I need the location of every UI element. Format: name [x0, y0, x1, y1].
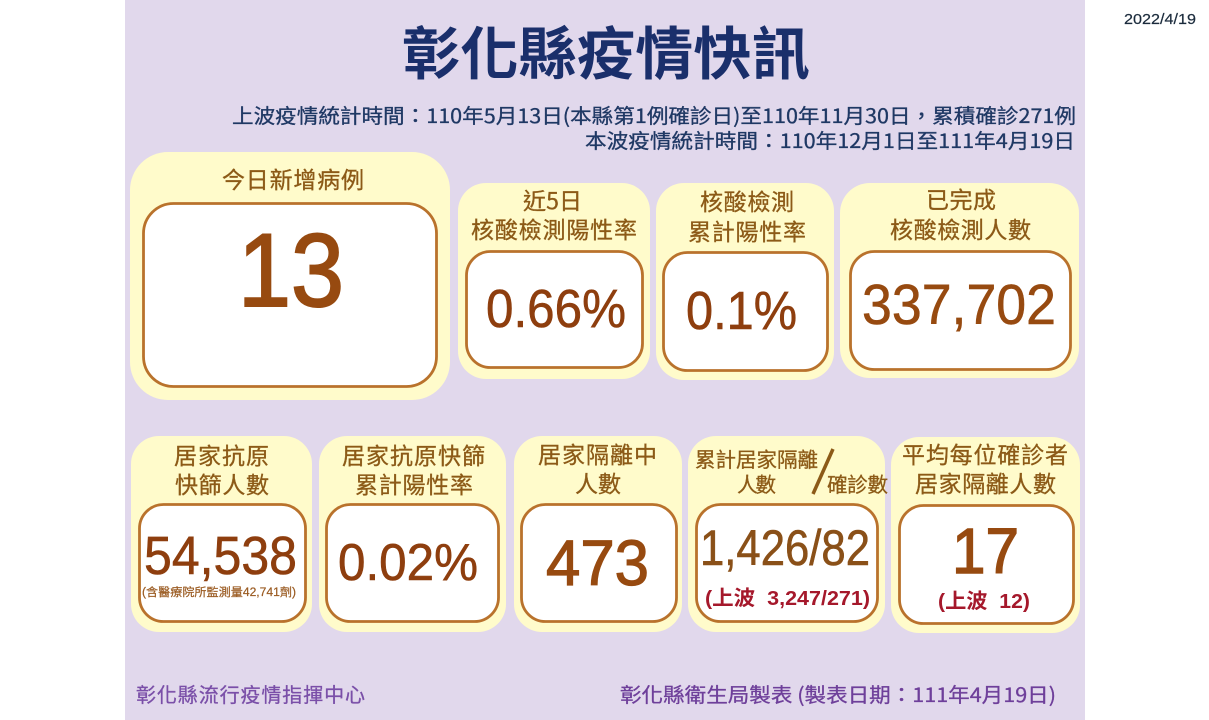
note: hospital monitoring: (含醫療院所監測量42,741劑)	[142, 585, 296, 599]
value: 17: 17	[952, 515, 1019, 587]
label: PCR tests completed	[890, 181, 1031, 245]
panel: cumulative PCR positivity	[656, 183, 834, 380]
label: home antigen cumulative positivity: 累計陽性率	[355, 466, 473, 500]
panel: currently in home isolation	[514, 436, 682, 632]
previous wave value: (上波 3,247/271)	[705, 587, 870, 610]
value: 0.1%: 0.1%	[686, 281, 797, 341]
label: home antigen cumulative positivity	[342, 437, 485, 500]
title: 彰化縣疫情快訊	[402, 9, 810, 91]
lavender background panel	[125, 0, 1085, 720]
previous wave period: 上波疫情統計時間：110年5月13日(本縣第1例確診日)至110年11月30日，累積確診271例	[232, 100, 1076, 129]
value: 1,426/82: 1,426/82	[700, 520, 870, 576]
label: home antigen cumulative positivity: 居家抗原快篩	[342, 437, 485, 471]
label: cumulative home isolation / confirmed	[695, 443, 888, 498]
label: currently in home isolation: 人數	[575, 465, 621, 499]
label: 5-day PCR positivity: 核酸檢測陽性率	[471, 211, 637, 245]
value: 473: 473	[546, 527, 649, 599]
label: cumulative home isolation / confirmed: 確診數	[827, 468, 888, 498]
panel: home antigen cumulative positivity	[319, 436, 506, 632]
value: 0.66%: 0.66%	[486, 279, 626, 339]
label: cumulative PCR positivity	[688, 183, 806, 247]
label: average isolated per confirmed case: 平均每位確診者	[902, 436, 1068, 470]
label: PCR tests completed: 已完成	[926, 181, 996, 215]
label: cumulative home isolation / confirmed: 累計居家隔離	[695, 443, 818, 473]
label: currently in home isolation	[538, 436, 657, 499]
value: 13: 13	[238, 213, 344, 329]
statistics period text	[232, 100, 1076, 154]
previous wave value: (上波 12)	[938, 590, 1030, 613]
label: cumulative PCR positivity: 核酸檢測	[700, 183, 794, 217]
value: 54,538: 54,538	[144, 526, 297, 586]
footer: command center: 彰化縣流行疫情指揮中心	[136, 679, 365, 708]
label: currently in home isolation: 居家隔離中	[538, 436, 657, 470]
label: average isolated per confirmed case: 居家隔離人數	[915, 465, 1056, 499]
panel: average isolated per confirmed case	[891, 436, 1080, 633]
panel: PCR tests completed	[840, 181, 1079, 378]
label: 5-day PCR positivity: 近5日	[523, 182, 582, 216]
panel: new cases today	[130, 152, 450, 400]
date stamp: 2022/4/19	[1124, 11, 1196, 28]
label: average isolated per confirmed case	[902, 436, 1068, 499]
label: home antigen screenings: 快篩人數	[175, 466, 269, 500]
value: 0.02%: 0.02%	[338, 534, 478, 592]
label: cumulative PCR positivity: 累計陽性率	[688, 213, 806, 247]
panel: home antigen screenings	[131, 436, 312, 632]
label: cumulative home isolation / confirmed: 人數	[737, 468, 776, 498]
panel: cumulative home isolation / confirmed	[688, 436, 888, 632]
label: new cases today: 今日新增病例	[222, 161, 364, 195]
label: PCR tests completed: 核酸檢測人數	[890, 211, 1031, 245]
panel: 5-day PCR positivity	[458, 182, 650, 379]
label: home antigen screenings: 居家抗原	[174, 437, 269, 471]
label: home antigen screenings	[174, 437, 269, 500]
footer: health bureau: 彰化縣衛生局製表 (製表日期：111年4月19日)	[620, 679, 1056, 708]
label: 5-day PCR positivity	[471, 182, 637, 245]
current wave period: 本波疫情統計時間：110年12月1日至111年4月19日	[585, 125, 1075, 154]
value: 337,702: 337,702	[862, 273, 1056, 337]
